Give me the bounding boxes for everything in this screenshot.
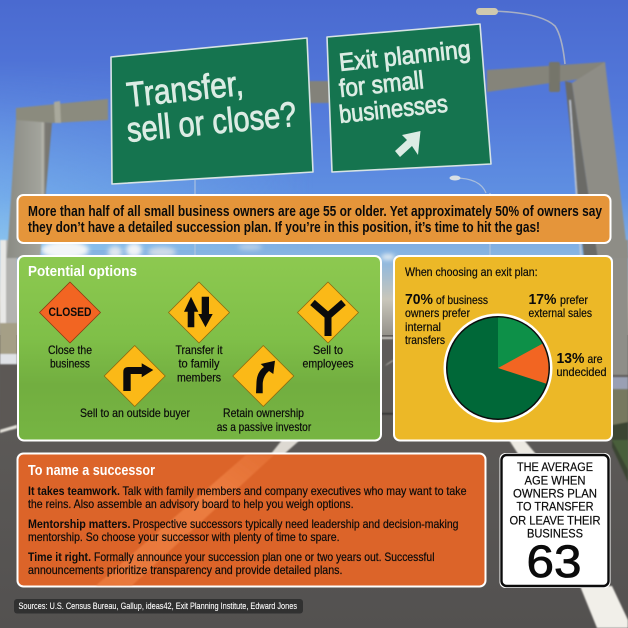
icon: right turn sign bbox=[104, 346, 165, 406]
speed limit sign: average age 63: TO TRANSFER bbox=[516, 502, 594, 514]
callout: intro band bbox=[18, 195, 610, 243]
text: 17 percent external sales bbox=[528, 291, 592, 320]
text: 70 percent internal transfers: owners prefer bbox=[405, 306, 470, 320]
panel: potential options bbox=[18, 256, 381, 440]
left shoulder: rail, foliage, lane stripe bbox=[0, 240, 17, 325]
text: transfer it to family members bbox=[176, 343, 223, 384]
icon: closed sign bbox=[40, 282, 100, 343]
text: close the business: business bbox=[50, 356, 90, 370]
panel: to name a successor bbox=[18, 454, 486, 586]
text: transfer it to family members: members bbox=[177, 370, 221, 384]
street lamps bbox=[195, 8, 565, 256]
sign: Exit planning for small businesses bbox=[327, 24, 491, 172]
text: close the business bbox=[48, 343, 92, 370]
speed limit sign: average age 63: OWNERS PLAN bbox=[513, 489, 597, 501]
text: it takes teamwork: It takes teamwork. bbox=[28, 484, 120, 498]
text: time it right bbox=[28, 550, 434, 577]
icon: fork sign bbox=[298, 282, 358, 343]
road markings bbox=[266, 440, 300, 460]
text: mentorship matters bbox=[28, 517, 458, 544]
sources: Sources: U.S. Census Bureau, Gallup, ideas42, Exit Planning Institute, Edward Jones bbox=[18, 601, 297, 612]
heading: to name a successor: To name a successor bbox=[28, 462, 155, 479]
text: mentorship matters: Prospective successors typically need leadership and decision-making bbox=[132, 517, 458, 531]
text: 70 percent internal transfers: of business bbox=[436, 293, 488, 307]
sign: Exit planning for small businesses: businesses bbox=[338, 90, 449, 129]
icon: closed sign: CLOSED bbox=[48, 307, 92, 319]
text: close the business: Close the bbox=[48, 343, 92, 357]
text: mentorship matters: mentorship. So choose your successor with plenty of time to spare. bbox=[28, 530, 340, 544]
text: retain ownership as a passive investor: Retain ownership bbox=[223, 406, 304, 420]
text: 13 percent undecided: 13% bbox=[556, 350, 584, 367]
text: sell to employees bbox=[302, 343, 354, 370]
sign: Transfer, sell or close? bbox=[111, 38, 313, 184]
heading: potential options: Potential options bbox=[28, 263, 137, 280]
speed limit sign: average age 63: BUSINESS bbox=[527, 529, 583, 541]
right shoulder: post, rail, foliage bbox=[612, 240, 628, 375]
speed limit sign: average age 63 bbox=[500, 453, 610, 588]
heading: when choosing an exit plan: When choosing an exit plan: bbox=[405, 265, 538, 279]
gantry structure bbox=[7, 62, 628, 258]
speed limit sign: average age 63: THE AVERAGE bbox=[517, 462, 593, 474]
speed limit sign: average age 63: AGE WHEN bbox=[524, 476, 586, 488]
icon: two-way traffic sign bbox=[168, 282, 230, 343]
sign: Transfer, sell or close?: sell or close? bbox=[125, 95, 298, 150]
pie chart bbox=[444, 314, 552, 422]
speed limit sign: average age 63: 63 bbox=[526, 536, 582, 587]
sources bbox=[14, 599, 303, 614]
text: retain ownership as a passive investor: as a passive investor bbox=[217, 420, 311, 434]
text: 13 percent undecided bbox=[556, 350, 606, 379]
sign: Transfer, sell or close?: Transfer, bbox=[125, 64, 245, 115]
text: 70 percent internal transfers: internal bbox=[405, 320, 441, 334]
text: sell to employees: employees bbox=[302, 356, 354, 370]
text: retain ownership as a passive investor bbox=[217, 406, 311, 434]
text: time it right: Time it right. bbox=[28, 550, 91, 564]
panel: when choosing an exit plan bbox=[394, 256, 612, 440]
text: sell to an outside buyer: Sell to an outside buyer bbox=[80, 406, 190, 420]
text: 70 percent internal transfers: 70% bbox=[405, 291, 433, 308]
text: 17 percent external sales: prefer bbox=[560, 293, 588, 307]
text: 17 percent external sales: external sales bbox=[528, 306, 592, 320]
text: it takes teamwork: the reins. Also assemble an advisory board to help you weigh options. bbox=[28, 497, 354, 511]
text: 17 percent external sales: 17% bbox=[528, 291, 556, 308]
icon: curve sign bbox=[233, 346, 294, 406]
sign: Exit planning for small businesses: for small bbox=[338, 66, 425, 103]
text: it takes teamwork: Talk with family members and company executives who may want to take bbox=[122, 484, 467, 498]
text: it takes teamwork bbox=[28, 484, 467, 511]
text: 70 percent internal transfers: transfers bbox=[405, 333, 445, 347]
speed limit sign: average age 63: OR LEAVE THEIR bbox=[510, 516, 600, 528]
text: 13 percent undecided: are bbox=[588, 352, 603, 366]
text: 13 percent undecided: undecided bbox=[556, 365, 606, 379]
text: transfer it to family members: Transfer it bbox=[176, 343, 223, 357]
text: mentorship matters: Mentorship matters. bbox=[28, 517, 130, 531]
icon: arrow pointing up-right bbox=[395, 131, 420, 157]
text: sell to employees: Sell to bbox=[313, 343, 343, 357]
text: time it right: Formally announce your succession plan one or two years out. Successful bbox=[94, 550, 434, 564]
text: 70 percent internal transfers bbox=[405, 291, 488, 347]
sign: Exit planning for small businesses: Exit planning bbox=[338, 35, 472, 77]
text: transfer it to family members: to family bbox=[178, 356, 220, 370]
text: time it right: announcements prioritize transparency and provide detailed plans. bbox=[28, 563, 342, 577]
